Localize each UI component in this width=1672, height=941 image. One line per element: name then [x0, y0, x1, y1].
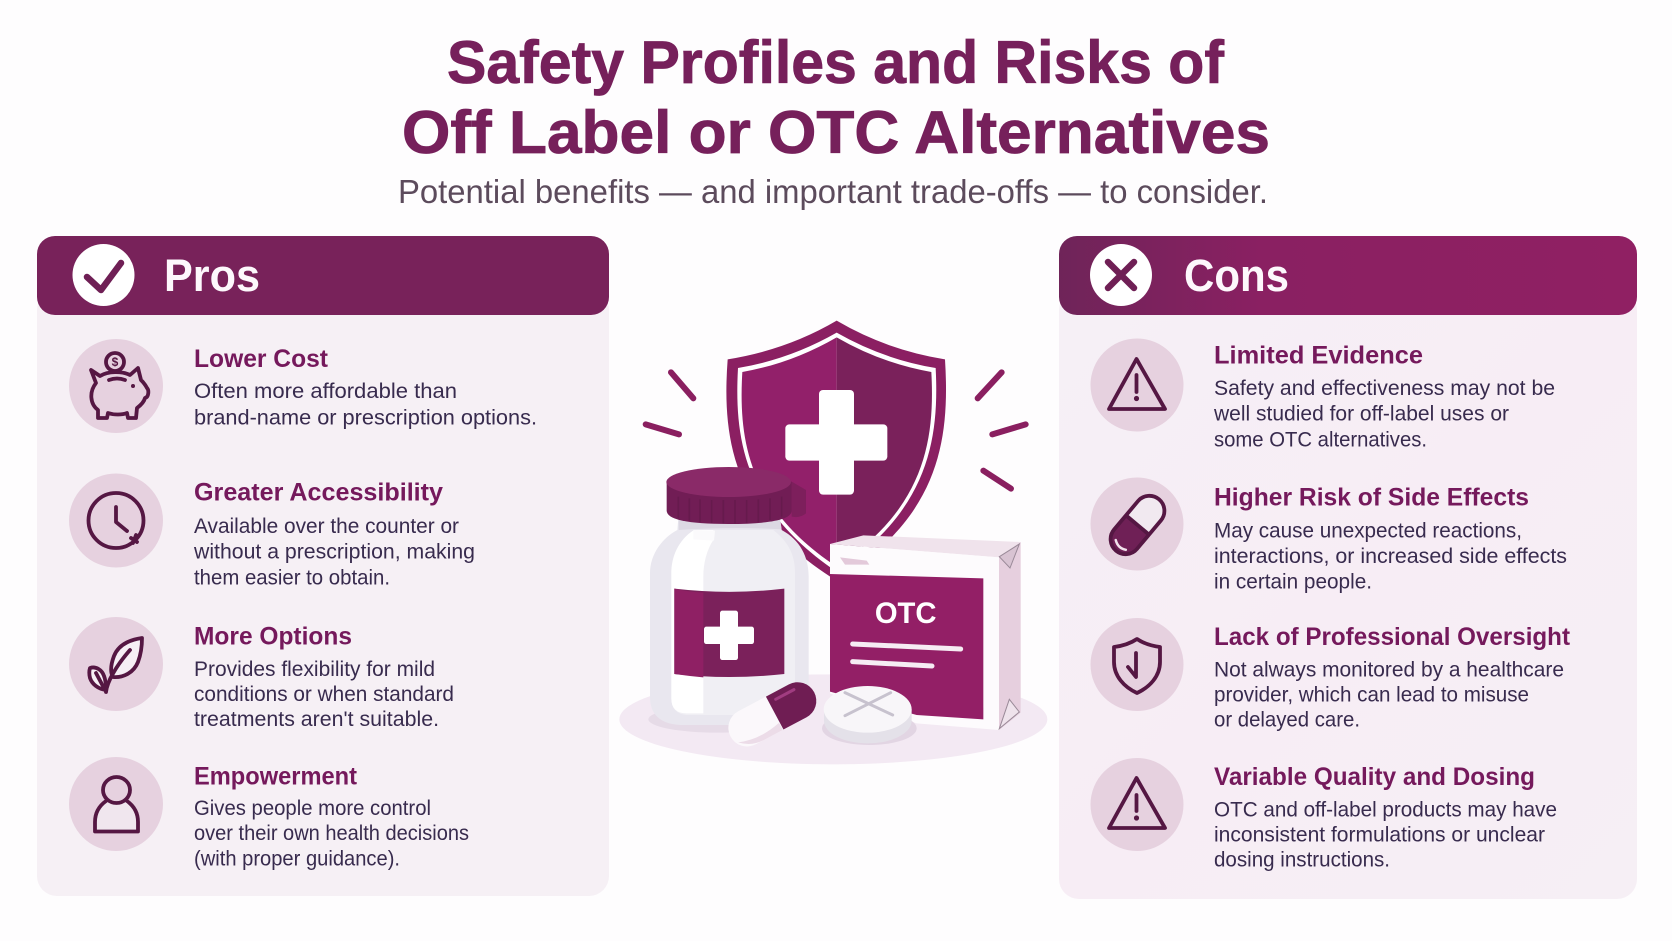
heading: Greater Accessibility: Greater Accessibility [194, 478, 443, 506]
panel: cons [1059, 236, 1637, 899]
pros heading: Pros [164, 250, 260, 301]
description: Lower Cost: brand-name or prescription options. [194, 406, 537, 430]
description: Lack of Professional Oversight: provider, which can lead to misuse [1214, 684, 1529, 706]
panel: pros [37, 236, 609, 896]
box text: OTC [875, 597, 936, 630]
description: More Options [194, 658, 454, 731]
description: Variable Quality and Dosing: OTC and off-label products may have [1214, 798, 1557, 822]
heading: Empowerment: Empowerment [194, 762, 358, 790]
icon: warning triangle [1090, 758, 1184, 851]
heading: Lower Cost: Lower Cost [194, 345, 329, 373]
title [402, 29, 1270, 166]
heading: Lack of Professional Oversight: Lack of Professional Oversight [1214, 623, 1571, 651]
icon: medicine bottle [648, 467, 809, 733]
icon: medical shield [726, 321, 946, 581]
icon: piggy bank: $ [112, 355, 119, 369]
con item: higher risk of side effects [1090, 478, 1567, 594]
heading: More Options: More Options [194, 622, 352, 650]
description: Empowerment [194, 797, 469, 870]
icon: round tablet [822, 686, 917, 745]
heading: Limited Evidence: Limited Evidence [1214, 342, 1423, 370]
description: More Options: conditions or when standard [194, 683, 454, 706]
rays [646, 372, 1026, 489]
description: Lower Cost [194, 380, 537, 430]
description: Higher Risk of Side Effects [1214, 520, 1567, 594]
pro item: lower cost [69, 339, 537, 433]
icon: OTC box [830, 535, 1021, 730]
description: Limited Evidence [1213, 377, 1555, 452]
icon: leaf sprout [69, 617, 163, 711]
description: Empowerment: (with proper guidance). [194, 848, 400, 870]
icon: check badge [72, 244, 134, 306]
pro item: more options [69, 617, 454, 731]
description: Greater Accessibility: without a prescription, making [193, 540, 475, 564]
description: Lack of Professional Oversight [1214, 658, 1564, 732]
description: Limited Evidence: Safety and effectiveness may not be [1214, 377, 1555, 400]
title: Off Label or OTC Alternatives [402, 99, 1270, 166]
bottle cap [792, 482, 806, 517]
description: Limited Evidence: well studied for off-label uses or [1213, 402, 1509, 426]
description: Higher Risk of Side Effects: May cause unexpected reactions, [1214, 520, 1522, 542]
cons header bar [1059, 236, 1637, 315]
description: Variable Quality and Dosing: inconsistent formulations or unclear [1214, 824, 1545, 846]
description: Greater Accessibility [193, 515, 475, 590]
illustration: shield, medicine bottle, OTC box and pills [619, 321, 1047, 764]
con item: variable quality and dosing [1090, 758, 1557, 872]
description: Greater Accessibility: Available over the counter or [194, 515, 459, 538]
description: Lack of Professional Oversight: or delayed care. [1214, 708, 1360, 732]
description: Limited Evidence: some OTC alternatives. [1214, 428, 1427, 452]
floor shadow [619, 674, 1047, 764]
shield cross [785, 390, 887, 495]
description: Higher Risk of Side Effects: interactions, or increased side effects [1214, 545, 1567, 568]
icon: warning triangle [1090, 338, 1184, 432]
description: Higher Risk of Side Effects: in certain people. [1214, 570, 1372, 594]
description: Empowerment: over their own health decisions [194, 822, 469, 845]
subtitle: Potential benefits — and important trade-offs — to consider. [398, 173, 1268, 210]
cons heading: Cons [1184, 250, 1289, 301]
description: Greater Accessibility: them easier to obtain. [194, 566, 390, 590]
pro item: empowerment [69, 757, 469, 870]
description: Lower Cost: Often more affordable than [194, 380, 457, 403]
icon: capsule pill [722, 676, 823, 753]
icon: capsule [1090, 478, 1184, 570]
description: Empowerment: Gives people more control [194, 797, 431, 820]
icon: clock [69, 474, 163, 568]
description: Lack of Professional Oversight: Not always monitored by a healthcare [1214, 658, 1564, 682]
heading: Variable Quality and Dosing: Variable Quality and Dosing [1214, 763, 1535, 791]
icon: piggy bank [69, 339, 163, 433]
pro item: greater accessibility [69, 474, 475, 590]
bottle label [674, 589, 784, 677]
description: Variable Quality and Dosing: dosing instructions. [1214, 848, 1390, 872]
con item: lack of professional oversight [1090, 618, 1571, 732]
icon: x badge [1090, 244, 1152, 306]
title: Safety Profiles and Risks of [447, 29, 1225, 96]
pros header bar [37, 236, 609, 315]
con item: limited evidence [1090, 338, 1555, 452]
description: More Options: Provides flexibility for mild [194, 658, 435, 681]
icon: shield check [1090, 618, 1184, 711]
icon: person [69, 757, 163, 851]
heading: Higher Risk of Side Effects: Higher Risk of Side Effects [1214, 484, 1529, 512]
description: More Options: treatments aren't suitable. [194, 708, 439, 731]
description: Variable Quality and Dosing [1214, 798, 1557, 872]
